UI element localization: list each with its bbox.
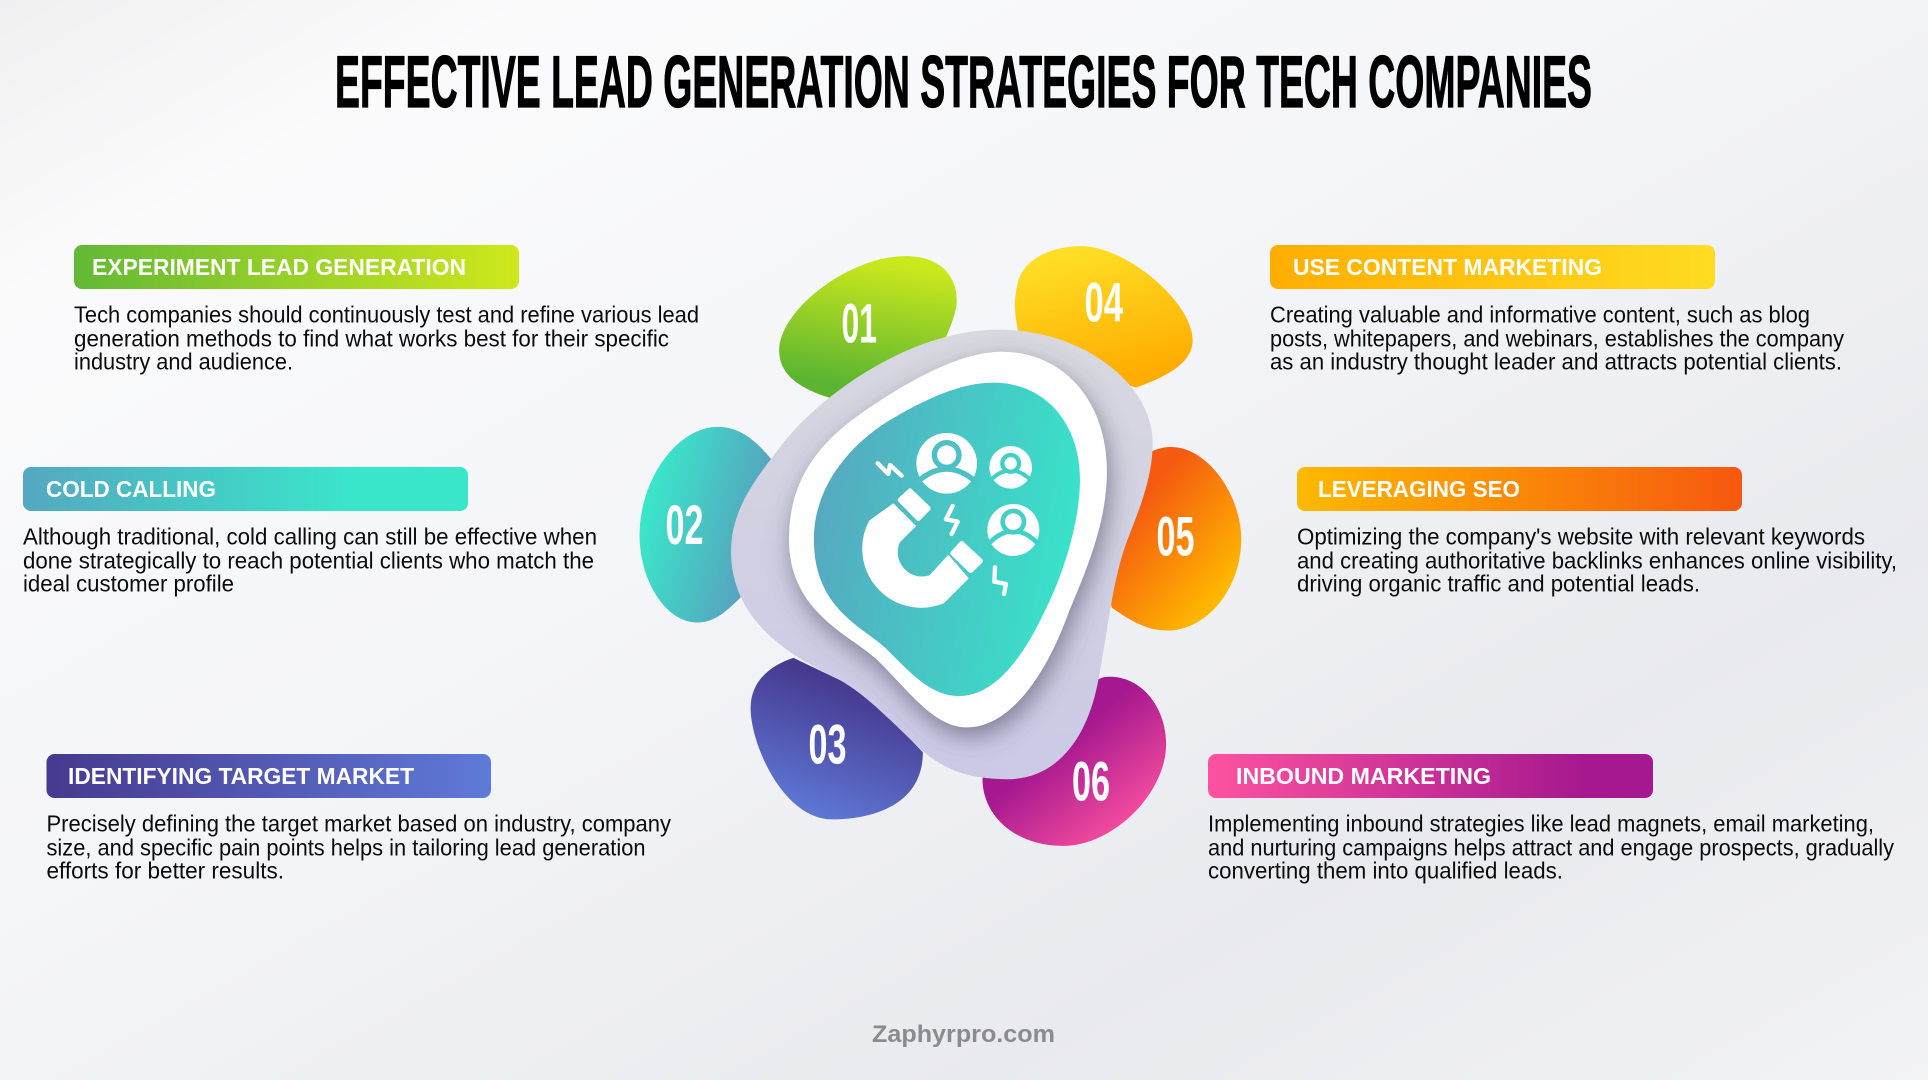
text block: inbound marketing: and nurturing campaigns helps attract and engage prospects, gradually <box>1208 834 1894 860</box>
petal 01 <box>779 256 957 411</box>
number 05: 05 <box>1156 504 1194 568</box>
text block: cold calling: ideal customer profile <box>23 570 234 596</box>
petals <box>640 246 1241 846</box>
text block: use content marketing: as an industry thought leader and attracts potential clients. <box>1270 348 1842 374</box>
text block: cold calling: Although traditional, cold calling can still be effective when <box>23 524 597 550</box>
heading bar: leveraging seo <box>1297 467 1742 511</box>
text block: experiment lead generation <box>74 302 699 374</box>
text block: inbound marketing: Implementing inbound strategies like lead magnets, email marketing, <box>1208 810 1874 836</box>
heading bar: use content marketing: USE CONTENT MARKETING <box>1293 254 1602 280</box>
panel: identifying target market <box>46 754 671 884</box>
center blob stack <box>731 330 1153 779</box>
text block: experiment lead generation: industry and audience. <box>74 348 293 374</box>
number 01: 01 <box>842 292 877 354</box>
text block: identifying target market: size, and specific pain points helps in tailoring lead generation <box>46 834 646 860</box>
icon: magnet <box>863 491 981 607</box>
heading bar: inbound marketing: INBOUND MARKETING <box>1236 763 1491 789</box>
text block: inbound marketing <box>1208 810 1894 884</box>
icon: person small <box>989 446 1032 489</box>
text block: cold calling: done strategically to reach potential clients who match the <box>23 548 594 574</box>
central diagram <box>640 246 1241 846</box>
text block: leveraging seo: driving organic traffic and potential leads. <box>1297 570 1700 596</box>
icon: lightning bolts <box>878 463 1006 594</box>
text block: cold calling <box>23 524 597 596</box>
number 03: 03 <box>808 712 846 776</box>
text block: experiment lead generation: Tech companies should continuously test and refine various lead <box>74 302 699 328</box>
text block: use content marketing: Creating valuable and informative content, such as blog <box>1270 302 1810 328</box>
petal 05 <box>1089 447 1241 631</box>
icon: person medium <box>987 504 1039 556</box>
text block: leveraging seo <box>1297 524 1897 596</box>
number 06: 06 <box>1072 750 1110 812</box>
petal 06 <box>982 677 1166 846</box>
heading bar: cold calling <box>23 467 468 511</box>
number 04: 04 <box>1084 270 1123 334</box>
text block: identifying target market: efforts for better results. <box>46 858 284 884</box>
text block: use content marketing <box>1270 302 1844 374</box>
heading bar: experiment lead generation <box>74 245 519 289</box>
text block: leveraging seo: Optimizing the company's website with relevant keywords <box>1297 524 1865 550</box>
panel: use content marketing <box>1270 245 1844 374</box>
lavender blob <box>731 330 1153 779</box>
text block: use content marketing: posts, whitepapers, and webinars, establishes the company <box>1270 326 1844 352</box>
icon group: magnet and people <box>863 433 1039 607</box>
heading bar: identifying target market: IDENTIFYING TARGET MARKET <box>68 763 414 789</box>
text block: identifying target market: Precisely defining the target market based on industry, company <box>46 810 671 836</box>
text block: inbound marketing: converting them into qualified leads. <box>1208 858 1563 884</box>
number 02: 02 <box>666 493 704 556</box>
petal 02 <box>640 427 783 623</box>
text block: experiment lead generation: generation methods to find what works best for their specific <box>74 326 669 352</box>
heading bar: cold calling: COLD CALLING <box>46 476 216 502</box>
petal 04 <box>1015 246 1193 387</box>
icon: person large <box>916 433 977 494</box>
text block: identifying target market <box>46 810 671 884</box>
teal blob <box>814 383 1080 696</box>
panel: cold calling <box>23 467 597 596</box>
watermark: Zaphyrpro.com <box>872 1021 1055 1048</box>
heading bar: use content marketing <box>1270 245 1715 289</box>
heading bar: leveraging seo: LEVERAGING SEO <box>1318 476 1520 502</box>
panel: leveraging seo <box>1297 467 1897 596</box>
white blob <box>789 352 1107 727</box>
panel: experiment lead generation <box>74 245 699 374</box>
heading bar: identifying target market <box>46 754 491 798</box>
heading bar: experiment lead generation: EXPERIMENT LEAD GENERATION <box>92 254 466 280</box>
panel: inbound marketing <box>1208 754 1894 884</box>
text block: leveraging seo: and creating authoritative backlinks enhances online visibility, <box>1297 548 1897 574</box>
petal 03 <box>751 658 923 819</box>
heading bar: inbound marketing <box>1208 754 1653 798</box>
